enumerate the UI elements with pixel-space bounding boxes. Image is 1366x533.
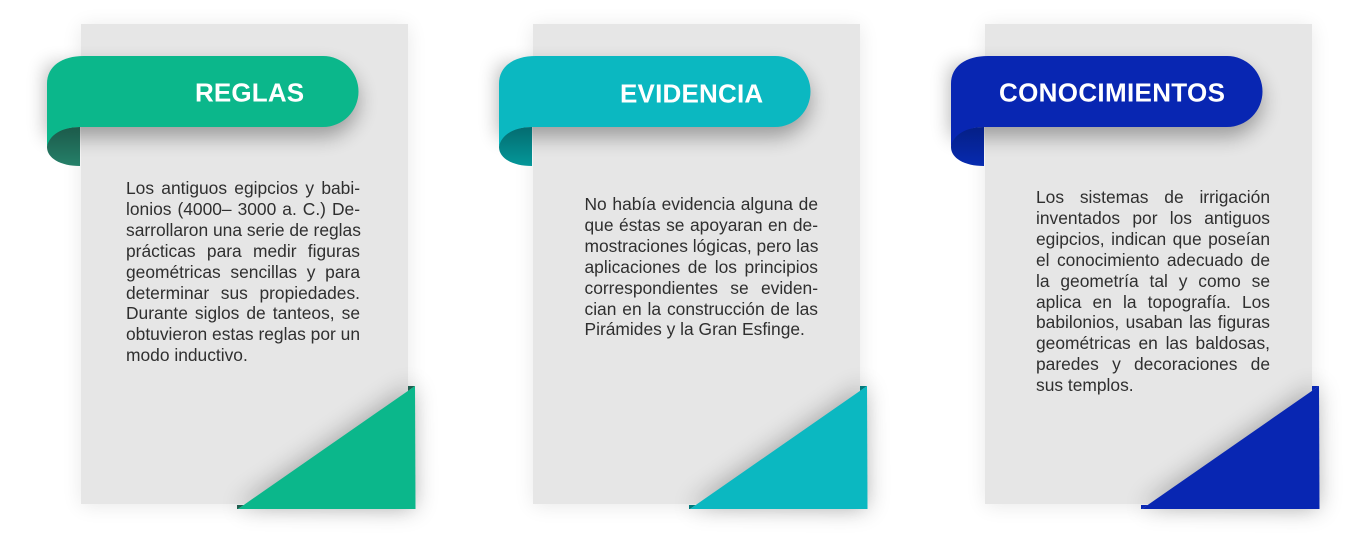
text: conocimientos: Los sistemas de irrigación [1036,187,1270,207]
text: reglas: modo inductivo. [126,345,248,365]
text: reglas: Los antiguos egipcios y babi- [126,178,360,198]
card: conocimientos [939,23,1332,522]
text: evidencia [584,194,818,339]
folded corner: conocimientos [1140,384,1319,509]
text: evidencia: que éstas se apoyaran en de- [584,215,818,235]
ribbon: conocimientos [950,56,1262,166]
text: reglas: determinar sus propiedades. [126,283,360,303]
card: evidencia [487,23,880,522]
text: conocimientos: sus templos. [1036,375,1134,395]
heading: conocimientos: CONOCIMIENTOS [998,78,1225,108]
text: reglas [126,178,361,365]
heading: reglas: REGLAS [195,78,304,108]
text: conocimientos [1036,187,1270,395]
heading: evidencia: EVIDENCIA [620,78,763,108]
text: evidencia: mostraciones lógicas, pero las [584,236,818,256]
ribbon: evidencia [499,56,810,166]
text: evidencia: Pirámides y la Gran Esfinge. [584,319,805,339]
text: reglas: lonios (4000– 3000 a. C.) De- [126,199,360,219]
panel: conocimientos background [984,24,1312,506]
ribbon: reglas [47,56,358,166]
text: conocimientos: el conocimiento adecuado de [1036,250,1270,270]
folded corner: reglas [236,384,416,509]
text: reglas: prácticas para medir figuras [126,241,360,261]
panel: reglas background [81,24,408,506]
text: evidencia: aplicaciones de los principios [584,257,818,277]
text: conocimientos: egipcios, indican que poseían [1036,229,1270,249]
text: reglas: Durante siglos de tanteos, se [126,303,360,323]
text: evidencia: No había evidencia alguna de [584,194,818,214]
text: conocimientos: aplica en la topografía. Los [1036,292,1270,312]
card: reglas [35,23,428,522]
text: conocimientos: la geometría tal y como se [1036,271,1270,291]
text: evidencia: correspondientes se eviden- [584,278,818,298]
panel: evidencia background [533,24,860,506]
text: conocimientos: paredes y decoraciones de [1036,354,1270,374]
text: reglas: geométricas sencillas y para [126,262,360,282]
text: conocimientos: geométricas en las baldosas, [1036,333,1270,353]
text: conocimientos: babilonios, usaban las figuras [1036,312,1270,332]
text: evidencia: cian en la construcción de las [584,299,818,319]
text: conocimientos: inventados por los antiguos [1036,208,1270,228]
text: reglas: sarrollaron una serie de reglas [126,220,361,240]
text: reglas: obtuvieron estas reglas por un [126,324,360,344]
folded corner: evidencia [688,384,868,509]
